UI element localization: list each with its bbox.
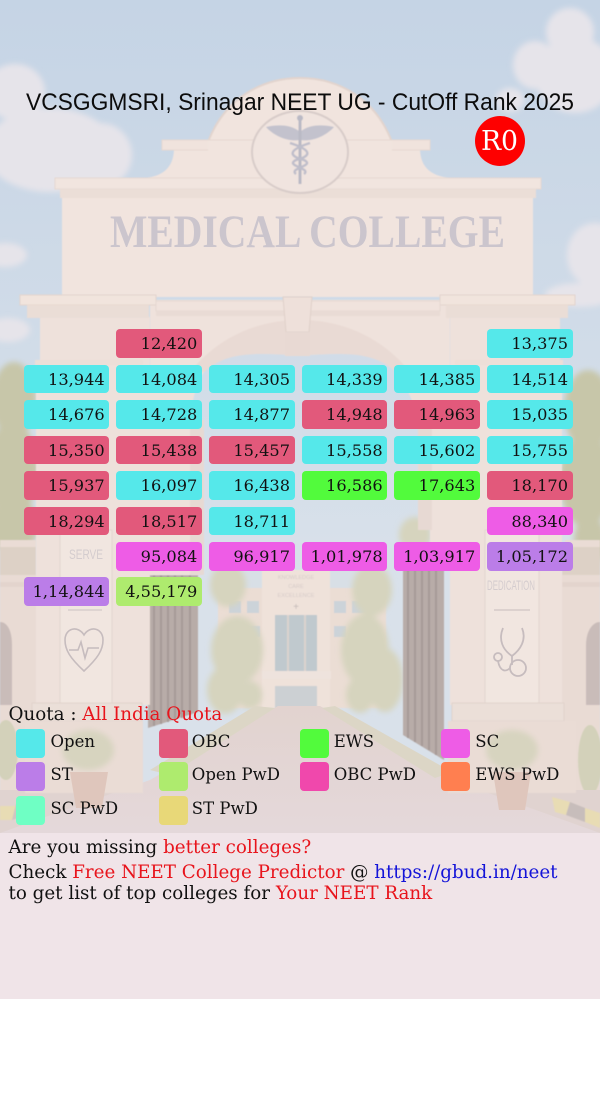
distant building: KNOWLEDGE [278,575,314,581]
row 7: 1,05,172 [496,547,568,566]
icon: heart with pulse [65,610,103,671]
row 2: 14,084 [141,370,197,389]
row 3: 14,948 [326,405,383,424]
title: VCSGGMSRI, Srinagar NEET UG - CutOff Rank 2025 [26,89,574,116]
pier label: SERVE: SERVE [69,546,103,562]
row 5: 15,937 [48,476,105,495]
row 2: 14,305 [233,370,290,389]
row 7: 95,084 [141,547,197,566]
row 4: 15,755 [511,441,568,460]
potted plants [62,730,538,810]
legend item: EWS PwD: EWS PwD [475,765,559,784]
legend item: Open PwD [159,762,280,791]
sky clouds [0,8,600,342]
iron gates [148,570,444,760]
row 2: 14,514 [511,370,568,389]
row 2: 14,339 [326,370,383,389]
row 2: 13,944 [48,370,105,389]
row 1 [116,329,573,358]
left pier [25,317,150,793]
row 5: 16,097 [141,476,197,495]
legend item: OBC PwD [300,762,416,791]
legend item: EWS PwD [441,762,559,791]
distant building: CARE [288,584,304,590]
row 6: 18,711 [233,512,290,531]
row 5: 16,438 [233,476,290,495]
promo text: college predictor link: Check Free NEET College Predictor @ https://gbud.in/neet [8,862,558,883]
legend item: OBC: OBC [192,732,230,751]
ground and driveway [0,790,600,833]
legend item: SC PwD [16,796,118,825]
legend item: ST PwD: ST PwD [192,799,258,818]
background illustration: medical college gate [0,0,600,833]
side trees [0,362,600,564]
cornice and keystone [20,295,575,365]
right pier [448,317,576,793]
emblem: caduceus in circle [252,111,348,193]
legend item: OBC PwD: OBC PwD [334,765,416,784]
row 5: 16,586 [326,476,383,495]
distant building: EXCELLENCE [278,593,315,599]
row 7 [116,542,573,571]
row 8 [24,577,202,606]
row 7: 1,03,917 [403,547,475,566]
legend item: SC PwD: SC PwD [50,799,118,818]
row 4 [24,436,573,464]
row 6 [24,507,573,535]
round badge: R0: R0 [481,126,518,157]
kerb stripes [0,797,600,828]
row 5: 18,170 [511,476,568,495]
legend item: Open [16,729,95,758]
row 1: 13,375 [511,334,568,353]
row 6: 88,340 [511,512,568,531]
pediment [55,78,541,297]
legend item: Open: Open [50,732,95,751]
panel: bottom message background [0,833,600,999]
quota heading: Quota : All India Quota [8,704,222,725]
row 6: 18,294 [48,512,105,531]
legend item: ST: ST [50,765,73,784]
distant building: + [293,602,299,613]
promo text: list of top colleges: to get list of top colleges for Your NEET Rank [8,883,432,904]
row 7: 1,01,978 [311,547,383,566]
legend item: SC [441,729,499,758]
arch center wall [148,300,452,575]
cutoff rank grid [24,329,573,606]
side wings [0,540,600,815]
legend item: ST [16,762,73,791]
row 3: 14,877 [233,405,290,424]
distant building [218,570,386,708]
row 3: 15,035 [511,405,568,424]
engraved heading: MEDICAL COLLEGE: MEDICAL COLLEGE [110,206,505,258]
row 3: 14,963 [419,405,475,424]
row 3: 14,728 [141,405,197,424]
legend item: OBC [159,729,230,758]
legend item: Open PwD: Open PwD [192,765,280,784]
row 4: 15,350 [48,441,105,460]
row 3 [24,400,573,429]
pier label: DEDICATION: DEDICATION [487,577,535,593]
row 6: 18,517 [141,512,197,531]
legend [16,729,559,825]
row 4: 15,438 [141,441,197,460]
row 7: 96,917 [233,547,290,566]
row 4: 15,602 [419,441,475,460]
row 2: 14,385 [419,370,475,389]
promo text: missing better colleges: Are you missing better colleges? [8,837,311,858]
row 3: 14,676 [48,405,105,424]
row 8: 4,55,179 [125,582,197,601]
row 4: 15,558 [326,441,383,460]
row 2 [24,365,573,393]
round badge: R0 [474,116,524,166]
row 8: 1,14,844 [33,582,105,601]
legend item: EWS [300,729,374,758]
row 5: 17,643 [419,476,475,495]
legend item: SC: SC [475,732,499,751]
row 4: 15,457 [233,441,290,460]
legend item: ST PwD [159,796,258,825]
legend item: EWS: EWS [334,732,374,751]
row 5 [24,471,573,500]
driveway trees [207,517,431,714]
icon: stethoscope [494,610,530,676]
row 1: 12,420 [141,334,197,353]
